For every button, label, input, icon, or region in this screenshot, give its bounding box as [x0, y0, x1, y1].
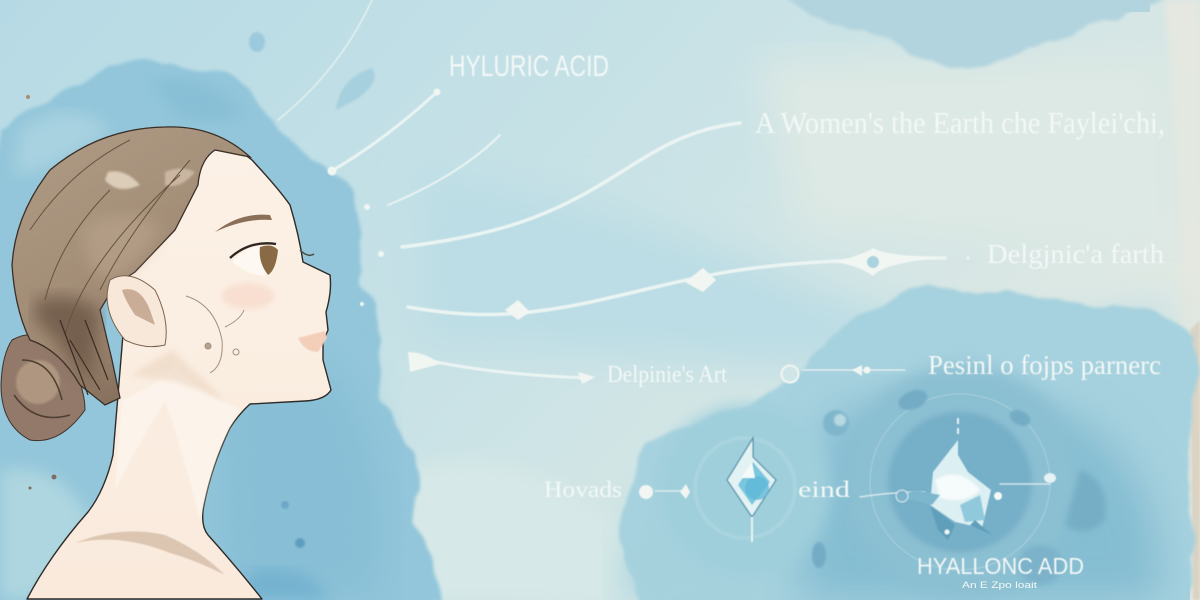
cheek marks	[186, 296, 244, 373]
white flow lines from the head to the labels	[278, 0, 1050, 497]
watercolor wash: large left blob behind head	[0, 59, 445, 600]
hair	[12, 127, 250, 405]
woman in profile	[1, 127, 331, 599]
neck shading	[115, 365, 240, 520]
label: and: eind	[798, 477, 851, 502]
label: bottom title: HYALLONC ADD	[917, 553, 1084, 579]
small crystal	[727, 438, 776, 542]
label: hovads: Hovads	[544, 477, 622, 502]
large crystal	[896, 418, 1056, 540]
eyebrow	[215, 215, 272, 232]
lips	[298, 331, 327, 352]
blush	[222, 283, 274, 309]
label: design right: Pesinl o fojps parnerc	[928, 350, 1161, 380]
watercolor wash: top right blob	[775, 0, 1165, 67]
label: middle right: Delgjnic'a farth	[987, 239, 1165, 269]
face, neck and shoulders	[27, 148, 331, 599]
hair highlights	[30, 140, 195, 395]
flow line nodes	[328, 88, 970, 499]
bun	[1, 334, 85, 441]
label: delphine art: Delpinie's Art	[607, 362, 727, 388]
collarbone shading	[75, 531, 225, 575]
watercolor wash: bottom right pool	[620, 288, 1195, 600]
label: upper right: A Women's the Earth che Faylei'chi,	[755, 105, 1165, 140]
label: top title: HYLURIC ACID	[449, 50, 609, 83]
small blue splashes	[26, 32, 375, 548]
label: bottom caption: An E Zpo loait	[962, 580, 1038, 590]
eye	[230, 243, 314, 276]
ear	[107, 276, 166, 347]
